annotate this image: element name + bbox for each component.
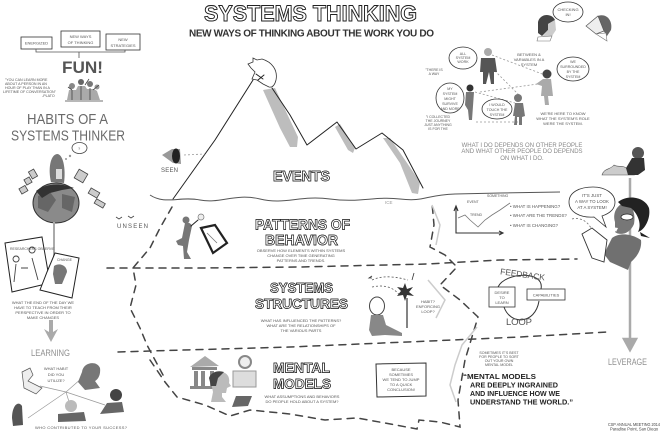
person bottom left [12, 404, 23, 426]
bubble: left person: SYSTEM [443, 92, 457, 96]
quote text: "YOU CAN LEARN MORE [5, 78, 48, 82]
quote: mental models [463, 372, 573, 406]
heading: patterns of behavior: BEHAVIOR [265, 232, 338, 249]
icon: polar bear on peak [248, 58, 276, 87]
bubble: checking in [553, 2, 583, 22]
text: system note right: WERE THE SYSTEM. [543, 121, 583, 126]
quote: mental models: UNDERSTAND THE WORLD.” [470, 398, 573, 406]
person right [110, 389, 122, 401]
bubble: left person: MIGHT [444, 97, 457, 101]
label: seen: SEEN [161, 168, 178, 174]
mountain [173, 80, 423, 199]
heading: mental models [273, 360, 331, 392]
question text: WHAT HABIT [44, 366, 69, 371]
text: system note left: JUST ANYTHING [424, 123, 452, 127]
icon: person with hourglass [176, 214, 227, 259]
new strategies box: NEW [118, 37, 128, 42]
text: perspective note [12, 300, 74, 320]
text: structures description [261, 318, 342, 333]
person: left [465, 84, 474, 120]
quote: mental models: “MENTAL MODELS [463, 372, 536, 381]
label: reinforcing loop [416, 299, 440, 314]
text: system note left: "I COLLECTED [426, 115, 451, 119]
text: patterns description: OBSERVE HOW ELEMENTS WITHIN SYSTEMS [257, 248, 346, 253]
heading: systems structures: STRUCTURES [255, 296, 348, 312]
person bottom [65, 400, 77, 412]
mountain outline [173, 80, 423, 199]
bubble: man [449, 47, 477, 69]
label: reinforcing loop: ENFORCING [416, 304, 440, 309]
label: reinforcing loop: HABIT? [421, 299, 436, 304]
bubble: middle person: TOUCH THE [487, 108, 508, 112]
new strategies box [106, 34, 140, 50]
heading: fun: FUN! [62, 58, 103, 77]
text: mental models description: DO PEOPLE HOLD ABOUT A SYSTEM? [265, 399, 339, 404]
bubble: man: ALL [460, 52, 466, 56]
floating cards [19, 169, 105, 208]
waterline [150, 192, 560, 201]
bubble: it's just a way: AT A SYSTEM! [577, 205, 607, 210]
label: reinforcing loop: LOOP? [421, 309, 435, 314]
text: sometimes it's best: MENTAL MODEL [485, 363, 513, 367]
questions list: • WHAT IS CHANGING? [510, 223, 559, 228]
label: ice: ICE [385, 200, 393, 205]
new strategies box: STRATEGIES [110, 43, 136, 48]
new ways of thinking box: NEW WAYS [70, 34, 92, 39]
woman reading [582, 197, 650, 270]
questions list: • WHAT ARE THE TRENDS? [510, 213, 567, 218]
mountain shadows [263, 88, 420, 194]
subtitle: NEW WAYS OF THINKING ABOUT THE WORK YOU DO [189, 28, 434, 40]
text: sometimes it's best: SOMETIMES IT'S BEST [479, 351, 519, 355]
bubble: woman: BY THE [567, 70, 580, 74]
text: structures description: WHAT ARE THE RELATIONSHIPS OF [266, 323, 336, 328]
callout box: quick conclusions: TO A QUICK [390, 382, 413, 387]
bubble: left person: AND MORE [440, 107, 460, 111]
text: between and variables: BETWEEN & [517, 52, 541, 57]
text: patterns description: PATTERNS AND TRENDS. [277, 258, 325, 263]
text: system note top [425, 68, 443, 76]
left column: energized box: ENERGIZED [25, 40, 48, 46]
dotted connections between people [475, 55, 545, 122]
text: perspective note: MAKE CHANGES [27, 315, 59, 320]
quote text [3, 78, 57, 98]
top right: pair of faces [537, 15, 611, 41]
text: system note left [424, 115, 452, 131]
bubble: it's just a way: A WAY TO LOOK [575, 199, 609, 204]
heading: systems structures [255, 280, 348, 312]
arrow: down to learning [44, 320, 58, 342]
iceberg dashed outline [130, 203, 478, 429]
text: perspective note: PERSPECTIVE IN ORDER TO [15, 310, 71, 315]
heading: mental models: MODELS [273, 376, 331, 392]
text: perspective note: HAVE TO TEACH FROM THEIR [14, 305, 72, 310]
bubble: left person: MY [447, 87, 453, 91]
connector arrow [36, 49, 125, 58]
icon: eye [162, 148, 205, 164]
strings [28, 378, 105, 418]
icon: crowd of people [65, 79, 103, 101]
text: structures description: WHAT HAS INFLUENCED THE PATTERNS? [261, 318, 342, 323]
icon: thinker on globe [33, 154, 79, 223]
bubble: man: SYSTEM [456, 56, 470, 60]
text: between and variables [514, 52, 545, 67]
dotted arrow to woman [572, 218, 592, 230]
bubble: it's just a way: IT'S JUST [582, 193, 602, 198]
text: system note left: THE JOURNEY [426, 119, 451, 123]
feedback loop: FEEDBACK [500, 266, 546, 282]
text: system note top: A WAY [429, 72, 440, 76]
text: mental models description [265, 394, 340, 404]
chart: trends sketch: EVENT [467, 200, 480, 204]
feedback loop [489, 266, 565, 328]
text: sometimes it's best: OUT YOUR OWN [485, 359, 514, 363]
heading: habits of a systems thinker [11, 111, 125, 144]
bubble: checking in: CHECKING [557, 7, 579, 12]
thought bubble [65, 142, 87, 160]
person: woman right [536, 70, 553, 105]
questions list [510, 204, 567, 228]
text: contributed to your success: WHO CONTRIBUTED TO YOUR SUCCESS? [35, 425, 128, 430]
text: between and variables: SYSTEM [521, 62, 537, 67]
question text: DID YOU [48, 372, 64, 377]
faint inner wiggle lines [428, 205, 477, 402]
bubble: woman: SURROUNDED [560, 65, 586, 69]
text: what I do depends [461, 143, 583, 162]
text: system note right [536, 111, 590, 126]
dashed level line 1 [107, 259, 577, 268]
person left [22, 368, 42, 394]
bubble: left person: SURVIVE [442, 102, 458, 106]
arrow: leverage [624, 178, 636, 350]
bubble: middle person: SYSTEM [490, 113, 504, 117]
question text: UTILIZE? [47, 378, 65, 383]
heading: patterns of behavior [255, 216, 350, 249]
bubble: it's just a way [569, 187, 615, 227]
chart: trends sketch: TREND [470, 213, 483, 217]
label: learning: LEARNING [31, 348, 70, 359]
bubble: checking in: IN! [565, 12, 571, 17]
footer credit [608, 422, 661, 431]
dashed level line 2 [118, 332, 607, 352]
bubble: woman: WE [570, 60, 576, 64]
label: leverage: LEVERAGE [608, 357, 647, 368]
comic page 1: RESEARCHERS OBSERVE [10, 247, 55, 251]
learning circle group [12, 363, 124, 426]
feedback loop: LOOP [506, 317, 532, 328]
callout box: quick conclusions: WE TEND TO JUMP [383, 377, 420, 382]
bubble: man: WORK [457, 60, 469, 64]
thought bubble: ? [78, 146, 81, 151]
chart: trends sketch: SOMETHING [487, 194, 508, 198]
bubble: middle person [482, 99, 512, 119]
label: unseen [116, 216, 148, 230]
heading: events: EVENTS [273, 169, 330, 185]
quote text: -PLATO [42, 94, 55, 98]
callout box: quick conclusions: SOMETIMES [389, 372, 413, 377]
person: man with tie [480, 48, 497, 84]
callout box: quick conclusions: BECAUSE [391, 367, 411, 372]
bubble: woman [557, 57, 589, 81]
quote text: ABOUT A PERSON IN AN [5, 82, 47, 86]
bubble: middle person: I WOULD [489, 103, 505, 107]
text: sometimes it's best: FOR PEOPLE TO SORT [479, 355, 520, 359]
feedback loop: CAPABILITIES [533, 292, 560, 298]
person top right [78, 363, 100, 390]
quote text: LIFETIME OF CONVERSATION" [3, 90, 57, 94]
text: structures description: THE VARIOUS PARTS [281, 328, 322, 333]
feedback loop: TO [499, 295, 505, 300]
text: perspective note: WHAT THE END OF THE DAY WE [12, 300, 74, 305]
callout box: quick conclusions: CONCLUSION! [387, 387, 415, 392]
new ways of thinking box: OF THINKING [68, 40, 93, 45]
callout box: quick conclusions [376, 363, 426, 397]
text: between and variables: VARIABLES IN A [514, 57, 545, 62]
text: system note left: IS FOR THE [428, 127, 448, 131]
bubble: left person [436, 83, 464, 113]
feedback loop: DESIRE [495, 290, 510, 295]
quote: mental models: AND INFLUENCE HOW WE [470, 389, 560, 398]
text: system note right: WE'RE HERE TO KNOW [540, 111, 586, 116]
text: what I do depends: WHAT I DO DEPENDS ON OTHER PEOPLE [462, 143, 582, 149]
text: patterns description [257, 248, 346, 263]
heading: mental models: MENTAL [273, 360, 330, 376]
comic page 2: CHANGE [57, 258, 73, 262]
text: mental models description: WHAT ASSUMPTIONS AND BEHAVIORS [265, 394, 340, 399]
new ways of thinking box [61, 31, 100, 47]
text: what I do depends: ON WHAT I DO. [500, 156, 544, 162]
text: what I do depends: AND WHAT OTHER PEOPLE DO DEPENDS [461, 149, 583, 155]
quote text: HOUR OF PLAY THAN IN A [5, 86, 51, 90]
label: unseen: UNSEEN [117, 224, 148, 230]
text: patterns description: CHANGE OVER TIME GENERATING [267, 253, 335, 258]
gray connector line [53, 222, 55, 258]
icon: boy with tree [369, 273, 414, 336]
text: system note right: WHAT THE SYSTEM'S ROLE [536, 116, 590, 121]
question text [44, 366, 69, 383]
chart: trends sketch [454, 194, 510, 235]
feedback loop: LEARN [495, 300, 509, 305]
icon: head with building, camera and book [190, 356, 256, 407]
bubble: woman: SYSTEM [566, 75, 580, 79]
person climbing on rock [602, 147, 645, 175]
heading: habits of a systems thinker: SYSTEMS THINKER [11, 128, 125, 144]
text: sometimes it's best [479, 351, 520, 367]
comic page 2 [40, 253, 79, 298]
heading: patterns of behavior: PATTERNS OF [255, 216, 350, 234]
comic page 1 [5, 237, 55, 292]
quote: mental models: ARE DEEPLY INGRAINED [470, 380, 558, 390]
questions list: • WHAT IS HAPPENING? [510, 204, 561, 209]
text: system note top: "THERE IS [425, 68, 443, 72]
heading: habits of a systems thinker: HABITS OF A [27, 111, 108, 128]
heading: systems structures: SYSTEMS [270, 280, 333, 296]
person: middle [513, 94, 525, 125]
left column: energized box [21, 37, 52, 49]
title: SYSTEMS THINKING [204, 1, 417, 26]
